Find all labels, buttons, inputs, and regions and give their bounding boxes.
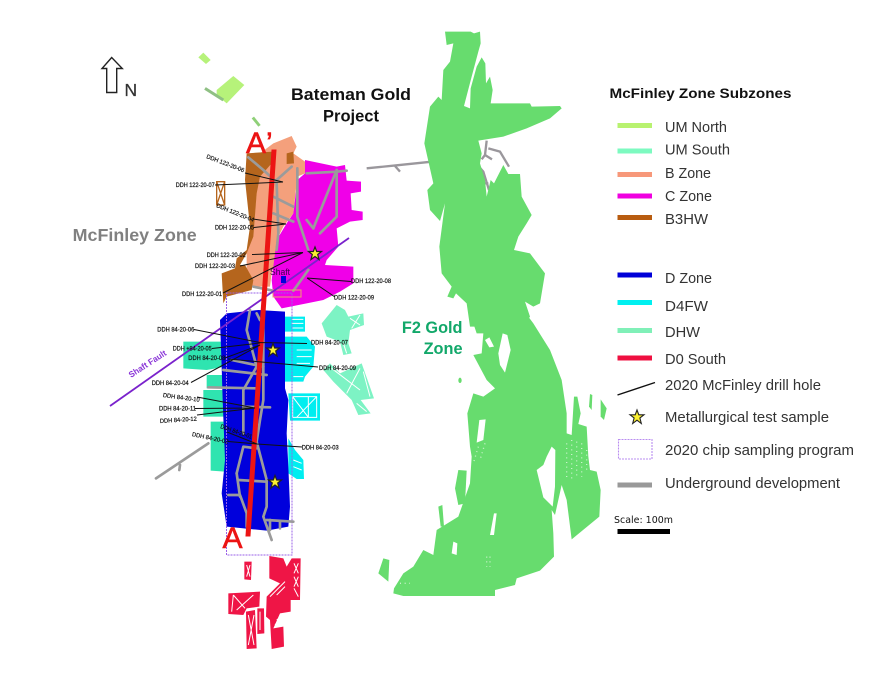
D4FW subzone [223, 317, 320, 479]
title: Bateman Gold [291, 86, 411, 104]
drill hole labels 84 series: DDH 84-20-06 [157, 328, 195, 334]
D0 South subzone [228, 556, 301, 649]
drill hole labels 122 series: DDH 122-20-06 [205, 154, 245, 174]
drill hole labels 122 series: DDH 122-20-08 [351, 279, 392, 285]
legend: UM North: UM North [665, 120, 727, 136]
legend title: McFinley Zone Subzones [610, 86, 792, 101]
orange chip sampling box [273, 290, 301, 297]
scale bar: Scale: 100m [614, 515, 673, 526]
drill hole labels 84 series: DDH 84-20-10 [162, 393, 201, 404]
Shaft Fault line [110, 238, 349, 406]
drill hole labels 84 series: DDH 84-20-11 [159, 406, 197, 412]
drill hole labels 84 series: DDH 84-20-01 [219, 424, 253, 441]
underground development workings [156, 157, 347, 540]
drill hole labels 84 series: DDH 84-20-09 [319, 366, 357, 372]
F2 Gold Zone label [402, 319, 462, 358]
legend: C Zone: C Zone [665, 189, 712, 205]
legend: metallurgical sample: Metallurgical test sample [665, 410, 829, 426]
B3HW subzone [217, 152, 294, 303]
title: Project [323, 108, 379, 126]
F2 underground development [367, 141, 509, 190]
metallurgical sample stars [266, 247, 322, 488]
legend: B Zone: B Zone [665, 166, 711, 182]
drill hole labels 122 series: DDH 122-20-07 [176, 183, 215, 189]
legend: UM South [618, 142, 730, 158]
legend: DHW [618, 325, 700, 341]
B Zone subzone [247, 136, 305, 287]
scale bar [614, 515, 673, 534]
cross section line A to A prime [222, 127, 276, 555]
legend: D Zone [618, 271, 712, 287]
drill hole labels 122 series [176, 154, 392, 302]
cross section line A to A prime: A [246, 127, 266, 160]
F2 Gold Zone label: Zone [424, 340, 462, 358]
chip sampling outline [226, 293, 292, 555]
legend: B3HW: B3HW [665, 212, 708, 228]
legend [610, 86, 854, 492]
drill hole labels 122 series: DDH 122-20-03 [195, 264, 236, 270]
drill holes McFinley north [215, 173, 351, 297]
drill hole labels 122 series: DDH 122-20-04 [215, 203, 255, 224]
C Zone subzone [272, 160, 363, 308]
north arrow [102, 58, 137, 100]
drill hole labels 84 series: DDH 84-20-08 [188, 356, 226, 362]
legend: C Zone [618, 189, 712, 205]
legend: chip sampling: 2020 chip sampling program [665, 443, 854, 459]
legend: D0 South [618, 352, 726, 368]
drill hole labels 84 series: DDH 84-20-07 [311, 340, 349, 346]
legend: D0 South: D0 South [665, 352, 726, 368]
legend: D Zone: D Zone [665, 271, 712, 287]
legend: D4FW: D4FW [665, 299, 708, 315]
legend: UM North [618, 120, 727, 136]
UM North subzone [198, 53, 261, 127]
legend: D4FW [618, 299, 708, 315]
drill hole labels 122 series: DDH 122-20-05 [215, 226, 255, 232]
legend: B Zone [618, 166, 711, 182]
F2 Gold Zone label: F2 Gold [402, 319, 462, 337]
D Zone subzone [220, 310, 290, 531]
drill holes McFinley south [191, 330, 318, 447]
cross section line A to A prime: ’ [266, 127, 273, 160]
DHW and UM South subzones [183, 305, 374, 472]
drill hole labels 84 series: DDH 84-20-12 [160, 417, 198, 425]
drill hole labels 84 series: DDH 84-20-02 [191, 432, 229, 446]
legend: UM South: UM South [665, 142, 730, 158]
Shaft Fault line: Shaft Fault [127, 348, 168, 380]
drill hole labels 84 series: DDH +84-20-05 [173, 346, 212, 352]
legend: underground development: Underground development [665, 476, 840, 492]
legend: drill hole: 2020 McFinley drill hole [665, 378, 821, 394]
legend: chip sampling [618, 440, 854, 459]
drill hole labels 122 series: DDH 122-20-09 [334, 296, 375, 302]
drill hole labels 84 series [152, 328, 357, 452]
cross section line A to A prime: A [222, 522, 243, 555]
legend: DHW: DHW [665, 325, 700, 341]
F2 gold zone orebody [378, 32, 607, 596]
title [291, 86, 411, 126]
McFinley Zone label: McFinley Zone [73, 225, 197, 245]
drill hole labels 122 series: DDH 122-20-02 [207, 253, 246, 259]
drill hole labels 84 series: DDH 84-20-03 [302, 446, 339, 452]
north arrow: N [124, 80, 137, 100]
drill hole labels 84 series: DDH 84-20-04 [152, 381, 189, 387]
legend: B3HW [618, 212, 708, 228]
drill hole labels 122 series: DDH 122-20-01 [182, 292, 223, 298]
shaft marker: Shaft [270, 267, 290, 277]
shaft marker [270, 267, 290, 283]
